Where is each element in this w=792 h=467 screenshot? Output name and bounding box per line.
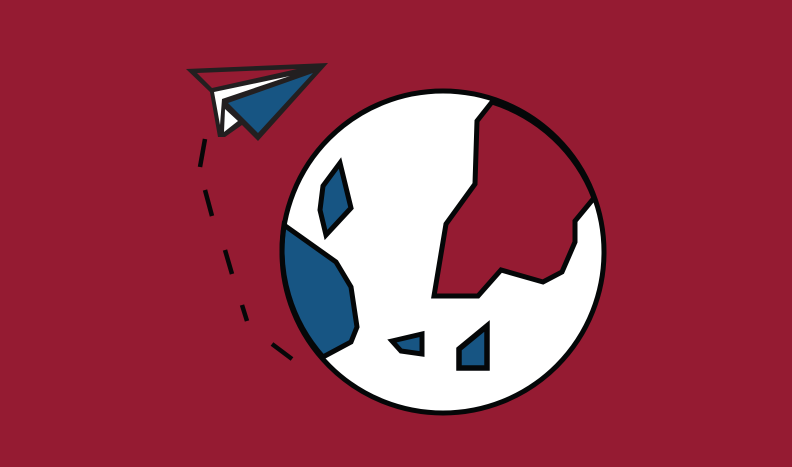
island: upper left xyxy=(320,163,351,235)
globe xyxy=(282,91,604,413)
plane top wing opening xyxy=(197,69,297,88)
plane blue wing xyxy=(228,73,313,133)
island: lower right xyxy=(459,326,487,368)
continent: left in blue xyxy=(282,225,357,357)
dashed flight path xyxy=(200,139,292,359)
continent: upper right in red xyxy=(434,102,594,296)
plane white lower fold xyxy=(224,109,238,132)
island: small centre xyxy=(392,334,422,354)
plane silhouette outline xyxy=(186,63,328,141)
plane white upper fold xyxy=(214,76,290,125)
globe outline xyxy=(282,91,604,413)
globe disc xyxy=(282,91,604,413)
paper plane xyxy=(186,63,328,141)
